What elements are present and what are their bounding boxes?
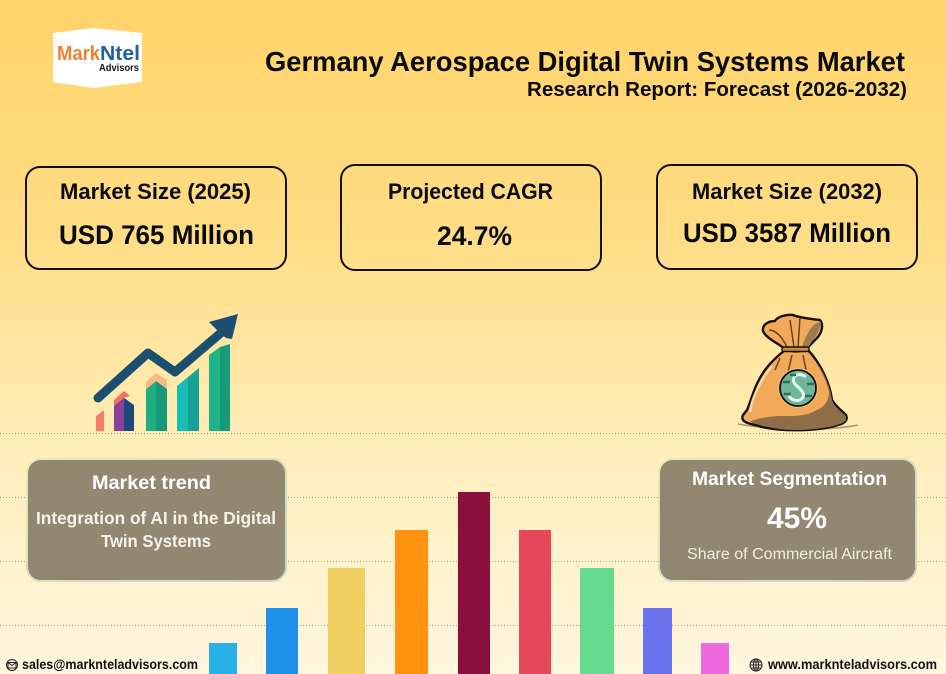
icon: envelope: [6, 660, 18, 670]
subtitle: Research Report: Forecast (2026-2032): [527, 78, 907, 101]
value: 24.7%: 24.7%: [437, 221, 512, 251]
text: trend description: Integration of AI in the Digital: [36, 508, 276, 528]
text: share of commercial aircraft: Share of Commercial Aircraft: [687, 546, 893, 563]
label: market size 2025: Market Size (2025): [60, 179, 251, 204]
icon: growth chart with arrow: [96, 314, 238, 431]
icon: globe: [750, 659, 762, 671]
heading: market trend: Market trend: [92, 472, 211, 494]
value: USD 3587 Million: USD 3587 Million: [683, 218, 891, 248]
icon: money bag: [738, 315, 858, 430]
label: projected CAGR: Projected CAGR: [388, 179, 553, 204]
value: USD 765 Million: USD 765 Million: [59, 220, 254, 250]
heading: market segmentation: Market Segmentation: [692, 468, 887, 490]
logo: MarkNtel Advisors: Advisors: [99, 63, 139, 74]
title: Germany Aerospace Digital Twin Systems Market: [265, 46, 905, 77]
label: market size 2032: Market Size (2032): [692, 179, 882, 204]
text: trend description: Twin Systems: [101, 531, 211, 551]
panel: market segmentation: [659, 459, 916, 581]
logo: MarkNtel Advisors: Ntel: [100, 43, 140, 65]
contact: email: sales@marknteladvisors.com: [22, 657, 198, 672]
contact: website: www.marknteladvisors.com: [767, 657, 937, 672]
logo: MarkNtel Advisors: Mark: [57, 43, 101, 65]
panel: market size 2032: [657, 165, 917, 269]
panel: market size 2025: [26, 167, 286, 269]
panel: projected CAGR: [341, 165, 601, 270]
panel: market trend: [27, 459, 286, 581]
bar chart: decorative rising and falling bars: [209, 492, 729, 674]
value: 45%: 45%: [767, 502, 827, 535]
logo: MarkNtel Advisors: [53, 28, 142, 88]
text: trend description: [36, 508, 276, 551]
